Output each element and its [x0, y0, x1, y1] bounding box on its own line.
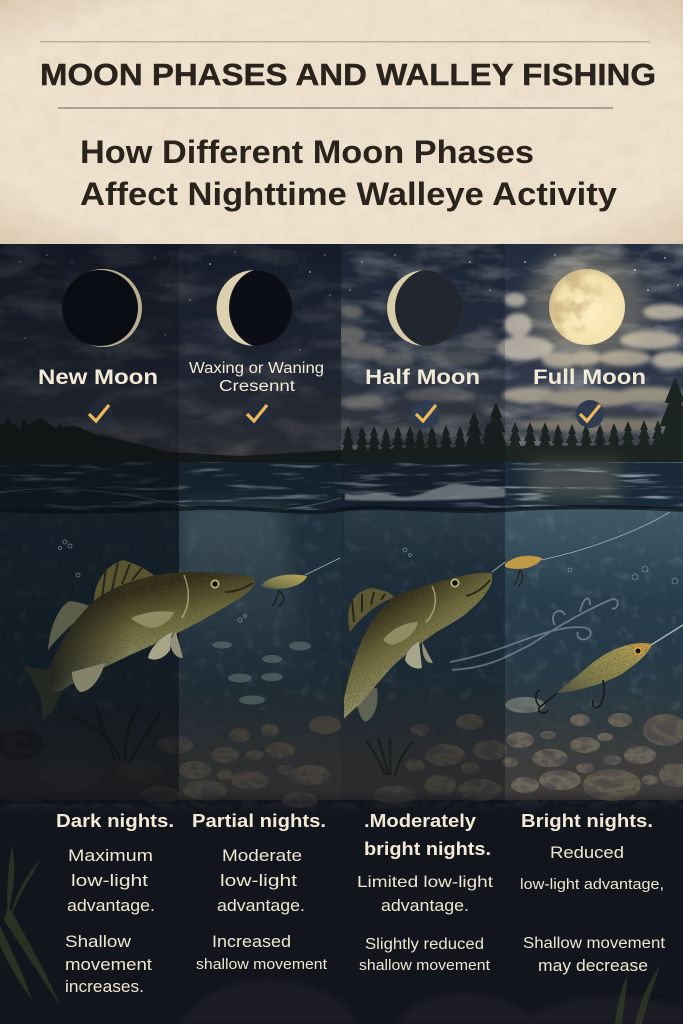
paper header panel	[0, 0, 683, 244]
check icon	[412, 400, 440, 428]
description: half moon: advantage.	[381, 896, 469, 915]
description: full moon: Shallow movement	[523, 935, 666, 952]
walleye fish, third panel	[340, 573, 492, 722]
subtitle	[80, 134, 617, 212]
moon: new	[62, 269, 142, 347]
stars	[19, 251, 679, 351]
subtitle: How Different Moon Phases	[80, 134, 534, 170]
large lure, fourth panel	[536, 625, 683, 713]
label: crescent: Waxing or Waning	[189, 360, 324, 377]
label: New Moon: New Moon	[38, 366, 158, 389]
description: full moon: may decrease	[538, 957, 648, 975]
column: Full Moon	[520, 247, 666, 975]
column brightness panels	[0, 244, 505, 804]
label: Half Moon: Half Moon	[365, 366, 480, 389]
subtitle: Affect Nighttime Walleye Activity	[80, 176, 617, 212]
description: new moon: Maximum	[68, 846, 153, 865]
description: crescent	[192, 811, 328, 973]
night sky background	[0, 244, 683, 462]
description: new moon: Shallow	[65, 932, 132, 951]
description: new moon: Dark nights.	[56, 811, 174, 831]
description: crescent: Partial nights.	[192, 811, 326, 831]
description: full moon: low-light advantage,	[520, 876, 664, 893]
Bottom text panel background	[0, 790, 683, 1024]
description: half moon: shallow movement	[359, 957, 491, 974]
description: crescent: advantage.	[217, 896, 305, 915]
column: New Moon	[38, 269, 174, 996]
light ray	[179, 500, 293, 630]
riverbed rocks	[8, 697, 683, 808]
label: crescent: Cresennt	[219, 378, 296, 395]
check icon	[243, 400, 271, 428]
description: full moon: Bright nights.	[521, 811, 653, 831]
description: new moon	[56, 811, 174, 996]
description: new moon: increases.	[65, 977, 144, 996]
water surface	[0, 462, 683, 512]
description: crescent: shallow movement	[196, 956, 328, 973]
description: new moon: movement	[65, 955, 152, 974]
lure, first panel	[261, 558, 340, 606]
description: full moon	[520, 811, 666, 975]
moon: full	[527, 247, 647, 367]
moon: half	[387, 270, 463, 346]
check icon	[87, 401, 113, 427]
description: new moon: advantage.	[67, 896, 155, 915]
swirling fishing lines	[450, 598, 618, 670]
description: full moon: Reduced	[550, 843, 624, 862]
description: half moon: bright nights.	[364, 839, 491, 859]
description: half moon: Slightly reduced	[365, 936, 484, 953]
label: Full Moon: Full Moon	[533, 366, 646, 389]
description: new moon: low-light	[71, 871, 148, 890]
distant treeline	[0, 377, 683, 462]
bubbles	[58, 540, 678, 622]
lure and line, fourth panel	[492, 512, 670, 586]
description: crescent: Moderate	[222, 846, 302, 865]
column: Half Moon	[357, 268, 494, 974]
walleye fish, first panel	[22, 560, 255, 722]
title: MOON PHASES AND WALLEY FISHING	[40, 57, 656, 92]
aquatic weeds	[70, 705, 412, 775]
description: crescent: low-light	[220, 871, 297, 890]
small fish school	[212, 642, 311, 704]
description: half moon: .Moderately	[364, 811, 476, 831]
underwater background	[0, 505, 683, 800]
grass	[0, 845, 660, 1024]
moon: crescent	[216, 268, 297, 348]
label: crescent	[189, 360, 324, 395]
description: half moon: Limited low-light	[357, 874, 494, 891]
check icon	[576, 400, 604, 428]
description: half moon	[357, 811, 494, 974]
description: crescent: Increased	[212, 932, 291, 951]
column: Crescent	[189, 268, 328, 973]
foam wave	[345, 484, 505, 501]
